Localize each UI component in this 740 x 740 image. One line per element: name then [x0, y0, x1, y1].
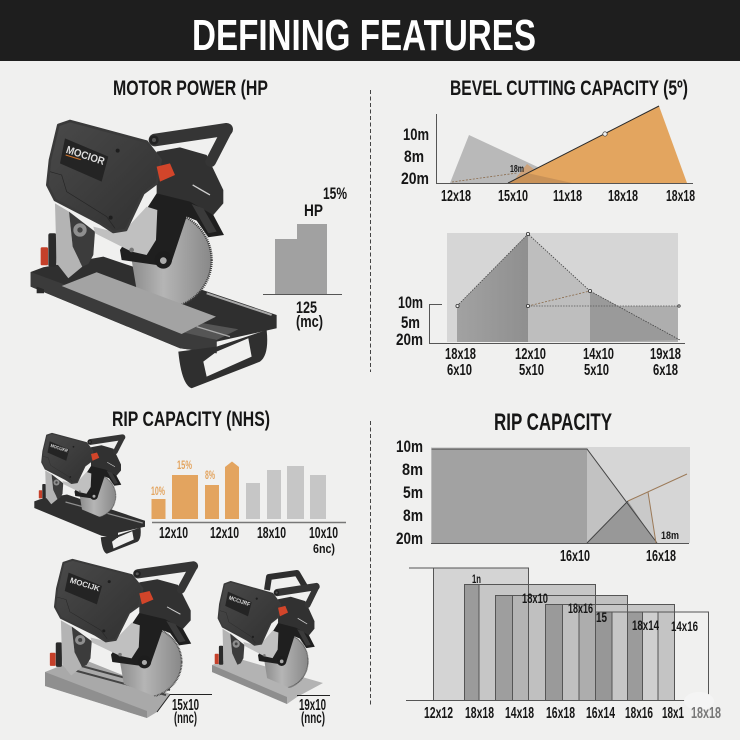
chart: rip capacity area: 5m	[403, 483, 423, 502]
chart: overlapping rip bars: 16x14	[586, 705, 615, 722]
chart: rip capacity area: 8m	[402, 460, 423, 479]
chart: overlapping rip bars: 18x16	[568, 600, 593, 616]
illustration: large saw with gray base	[45, 560, 212, 727]
chart: motor power bars: (mc)	[296, 312, 323, 331]
chart: bevel triangles: 12x18	[441, 188, 471, 205]
illustration: compact saw	[212, 573, 330, 727]
illustration: large saw with gray base: (nnc)	[174, 710, 197, 727]
heading: rip capacity: RIP CAPACITY	[494, 409, 612, 436]
chart: rip capacity bars: 10x10	[309, 525, 338, 542]
chart: bevel triangles: 8m	[404, 147, 424, 166]
chart: bevel area: 6x10	[447, 362, 472, 379]
illustration: main miter saw	[31, 121, 277, 388]
illustration: large saw with gray base: MOCIJK	[69, 576, 101, 593]
chart: motor power bars: 125	[296, 298, 317, 317]
title: DEFINING FEATURES	[192, 11, 536, 60]
chart: bevel triangles: 20m	[401, 169, 429, 188]
chart: overlapping rip bars: 12x12	[424, 705, 453, 722]
chart: overlapping rip bars: 18x14	[632, 617, 659, 633]
chart: overlapping rip bars: 1n	[472, 572, 481, 586]
chart: rip capacity bars	[151, 458, 346, 556]
chart: motor power bars: HP	[304, 201, 323, 220]
chart: rip capacity area: 8m	[403, 506, 423, 525]
chart: rip capacity area: 16x10	[560, 548, 590, 565]
chart: bevel area: 12x10	[515, 346, 546, 363]
chart: bevel area: 20m	[396, 330, 423, 349]
chart: bevel area: 5x10	[584, 362, 609, 379]
chart: bevel triangles	[401, 106, 695, 205]
chart: overlapping rip bars: 18x16	[625, 705, 653, 722]
illustration: small saw top: MOCIJKR	[50, 443, 69, 454]
chart: rip capacity bars: 12x10	[210, 525, 239, 542]
chart: overlapping rip bars: 18x1	[662, 705, 684, 722]
chart: rip capacity bars: 8%	[205, 468, 215, 482]
chart: bevel area	[396, 232, 685, 379]
chart: bevel triangles: 10m	[403, 125, 429, 144]
chart: bevel area: 6x18	[653, 362, 678, 379]
chart: bevel triangles: 11x18	[553, 188, 582, 205]
chart: overlapping rip bars: 18x18	[691, 705, 721, 722]
chart: bevel area: 18x18	[445, 346, 476, 363]
chart: bevel area: 5m	[401, 313, 420, 332]
chart: overlapping rip bars: 18x10	[522, 590, 548, 606]
chart: rip capacity bars: 18x10	[257, 525, 286, 542]
chart: rip capacity area: 18m	[661, 530, 679, 542]
chart: overlapping rip bars: 18x18	[465, 705, 494, 722]
heading: motor power: MOTOR POWER (HP	[113, 77, 268, 100]
chart: rip capacity area	[396, 437, 690, 565]
chart: rip capacity area: 16x18	[646, 548, 676, 565]
chart: motor power bars	[263, 184, 347, 331]
chart: bevel triangles: 18x18	[666, 188, 695, 205]
illustration: main miter saw: MOCIOR	[64, 144, 106, 168]
chart: rip capacity area: 10m	[396, 437, 423, 456]
chart: overlapping rip bars	[406, 568, 721, 722]
illustration: compact saw: (nnc)	[301, 710, 325, 727]
chart: bevel triangles: 18m	[510, 164, 524, 175]
chart: rip capacity area: 20m	[396, 529, 423, 548]
illustration: compact saw: MCCIJRF	[228, 595, 251, 608]
chart: overlapping rip bars: 14x16	[671, 618, 698, 634]
chart: bevel triangles: 15x10	[498, 188, 528, 205]
illustration: small saw top	[34, 433, 145, 554]
chart: overlapping rip bars: 15	[596, 609, 607, 625]
chart: bevel area: 14x10	[583, 346, 614, 363]
chart: motor power bars: 15%	[323, 184, 347, 203]
chart: rip capacity bars: 12x10	[159, 525, 188, 542]
chart: rip capacity bars: 15%	[177, 458, 192, 472]
heading: rip capacity nhs: RIP CAPACITY (NHS)	[112, 408, 270, 431]
chart: bevel area: 5x10	[519, 362, 544, 379]
chart: overlapping rip bars: 14x18	[505, 705, 534, 722]
header bar	[0, 0, 740, 61]
chart: bevel area: 10m	[398, 293, 423, 312]
chart: bevel area: 19x18	[650, 346, 681, 363]
illustration: large saw with gray base: 15x10	[172, 697, 199, 714]
chart: bevel triangles: 18x18	[608, 188, 638, 205]
illustration: compact saw: 19x10	[299, 697, 326, 714]
chart: overlapping rip bars: 16x18	[546, 705, 575, 722]
chart: rip capacity bars: 6nc)	[313, 541, 335, 556]
chart: rip capacity bars: 10%	[151, 484, 165, 498]
